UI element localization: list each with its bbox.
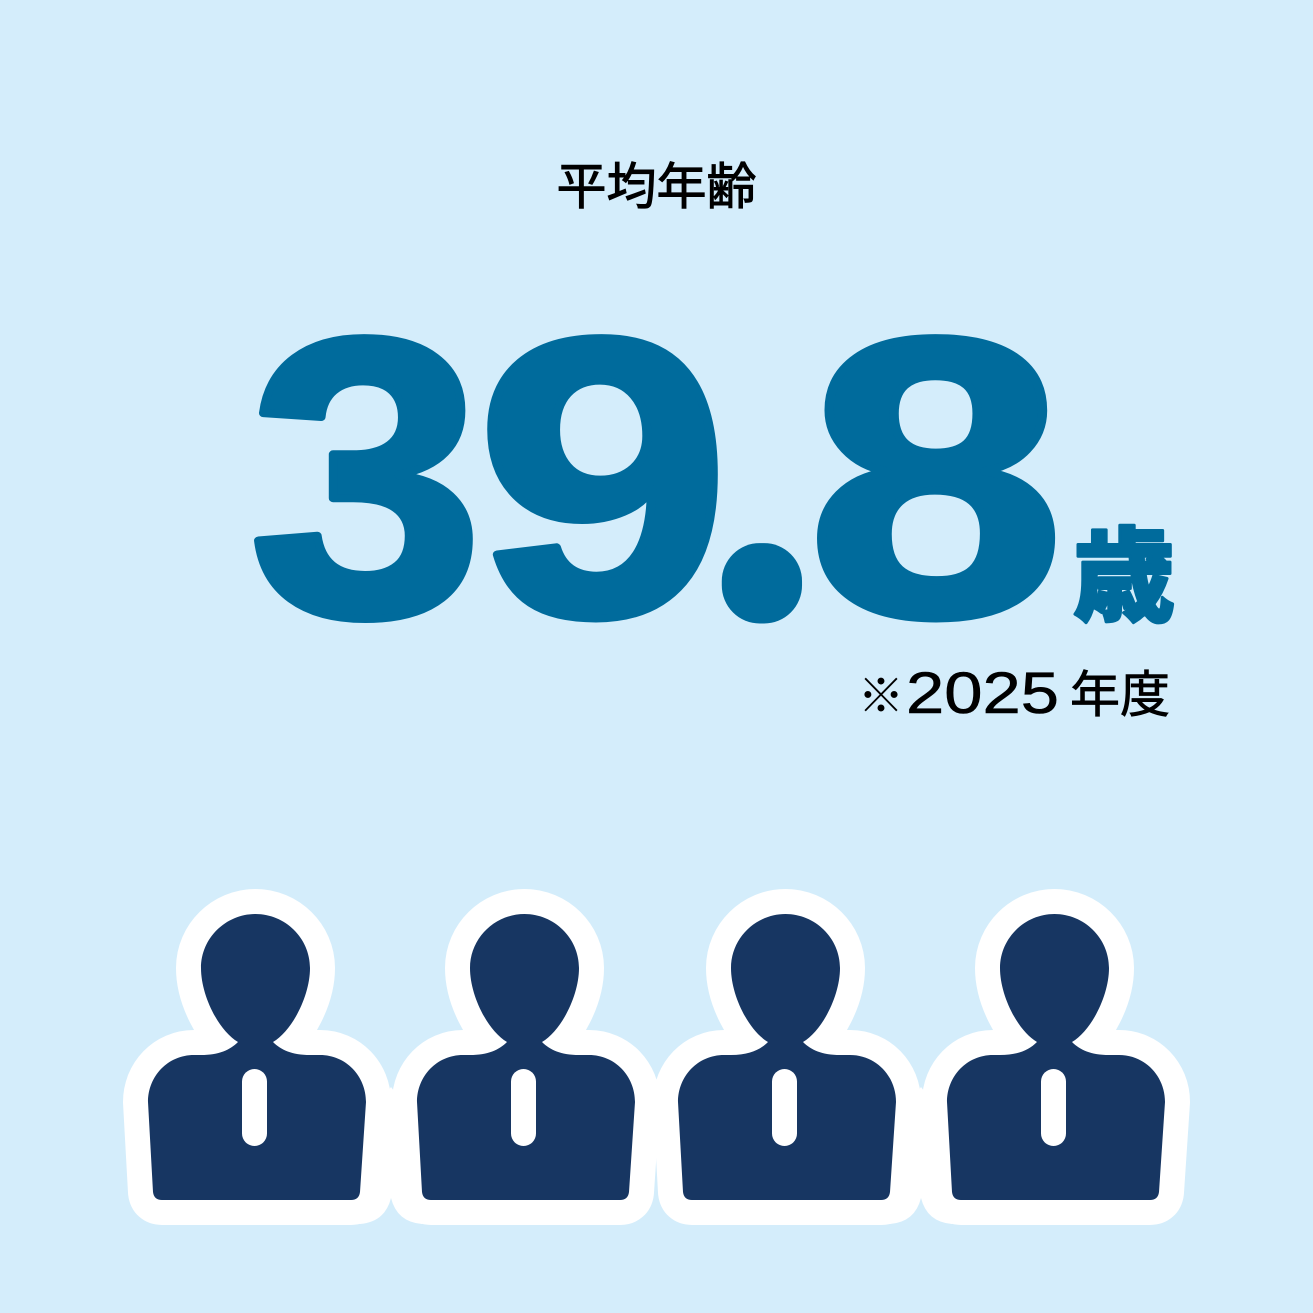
icon: person 2 (417, 914, 635, 1200)
big number: average age (249, 256, 1065, 699)
big number: average age: 3 (249, 256, 484, 699)
icon group: four people (148, 914, 1165, 1224)
white outline joins between people (360, 1087, 952, 1224)
note: fiscal year: 2025 (906, 661, 1059, 726)
note: fiscal year (858, 661, 1170, 726)
big number: average age: 9 (476, 256, 730, 699)
icon: person 3 (678, 914, 896, 1200)
title: 平均年齢 (556, 159, 756, 215)
unit: years old: 歳 (1073, 521, 1175, 635)
note: fiscal year: 年度 (1070, 667, 1170, 723)
note: fiscal year: ※ (858, 670, 904, 722)
icon: person 4 (947, 914, 1165, 1200)
icon: person 1 (148, 914, 366, 1200)
big number: average age: 8 (807, 257, 1065, 699)
big number: average age: . (758, 559, 766, 592)
